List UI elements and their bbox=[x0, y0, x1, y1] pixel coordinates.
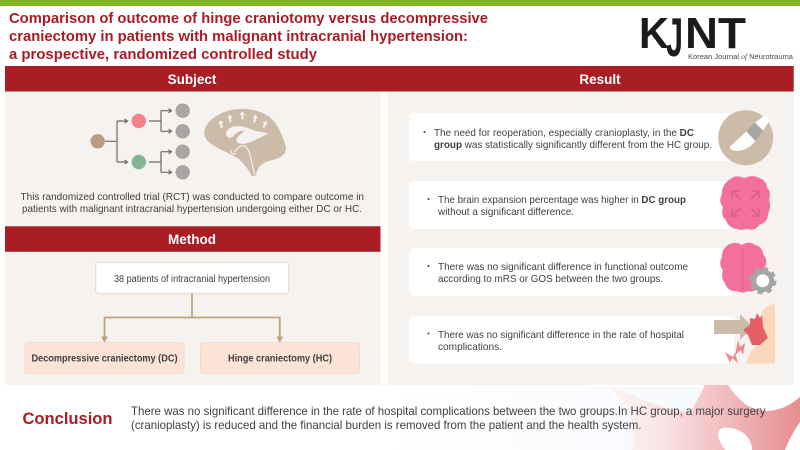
title: Comparison of outcome of hinge craniotomy versus decompressive bbox=[9, 10, 488, 27]
heading: method bbox=[5, 226, 380, 252]
panel: subject bbox=[5, 66, 400, 227]
icon: expanding brain bbox=[720, 176, 770, 230]
result card 2: The brain expansion percentage was higher in DC group bbox=[438, 194, 686, 206]
icon: brain with expansion arrows bbox=[204, 109, 286, 176]
KJNT logo: T bbox=[718, 9, 746, 58]
result card 2: without a significant difference. bbox=[437, 206, 574, 218]
conclusion bbox=[22, 404, 766, 432]
result card 2 bbox=[409, 181, 734, 229]
box: hinge craniectomy bbox=[200, 342, 360, 374]
top green bar bbox=[0, 0, 800, 6]
title: a prospective, randomized controlled study bbox=[9, 46, 318, 63]
panel: method bbox=[5, 226, 380, 385]
heading: method: Method bbox=[168, 232, 216, 247]
result card 1: The need for reoperation, especially cranioplasty, in the DC bbox=[434, 127, 694, 139]
box: decompressive craniectomy bbox=[25, 342, 184, 374]
arrow: split into two groups bbox=[102, 294, 282, 342]
KJNT logo: N bbox=[685, 9, 718, 58]
result card 1 bbox=[409, 113, 734, 161]
box: hinge craniectomy: Hinge craniectomy (HC) bbox=[228, 354, 332, 364]
title bbox=[9, 10, 488, 63]
icon: scalpel bbox=[718, 110, 773, 165]
box: patients: 38 patients of intracranial hypertension bbox=[114, 274, 270, 285]
KJNT logo: J bbox=[666, 6, 683, 68]
icon: head impact bbox=[714, 303, 775, 364]
decorative pink blob bbox=[607, 385, 800, 450]
result card 3 bbox=[409, 248, 734, 296]
result card 1: group was statistically significantly different from the HC group. bbox=[434, 139, 712, 151]
result card 4: complications. bbox=[438, 341, 502, 353]
KJNT logo: Korean Journal of Neurotrauma bbox=[688, 53, 793, 61]
heading: subject: Subject bbox=[168, 72, 217, 87]
result card 4: There was no significant difference in the rate of hospital bbox=[438, 329, 684, 341]
box: patients bbox=[96, 262, 289, 294]
result card 4 bbox=[409, 316, 734, 364]
KJNT logo bbox=[639, 6, 793, 68]
icon: randomization tree bbox=[90, 104, 190, 180]
title: craniectomy in patients with malignant intracranial hypertension: bbox=[9, 28, 468, 45]
icon: brain with gear bbox=[720, 243, 775, 293]
heading: result bbox=[380, 66, 794, 92]
result card 3: according to mRS or GOS between the two groups. bbox=[438, 273, 663, 285]
heading: result: Result bbox=[579, 72, 621, 87]
subject description: This randomized controlled trial (RCT) was conducted to compare outcome in bbox=[20, 191, 364, 203]
conclusion: Conclusion bbox=[22, 409, 112, 428]
subject description bbox=[20, 191, 364, 215]
subject description: patients with malignant intracranial hypertension undergoing either DC or HC. bbox=[22, 203, 362, 215]
conclusion text: (cranioplasty) is reduced and the financial burden is removed from the patient and the health system. bbox=[131, 418, 642, 432]
heading: subject bbox=[5, 66, 400, 92]
result card 3: There was no significant difference in functional outcome bbox=[438, 261, 688, 273]
KJNT logo: K bbox=[639, 9, 669, 58]
conclusion text bbox=[131, 404, 766, 432]
panel: result bbox=[380, 66, 794, 385]
box: decompressive craniectomy: Decompressive craniectomy (DC) bbox=[32, 354, 178, 364]
conclusion text: There was no significant difference in the rate of hospital complications between the two groups.In HC group, a major surgery bbox=[131, 404, 766, 418]
